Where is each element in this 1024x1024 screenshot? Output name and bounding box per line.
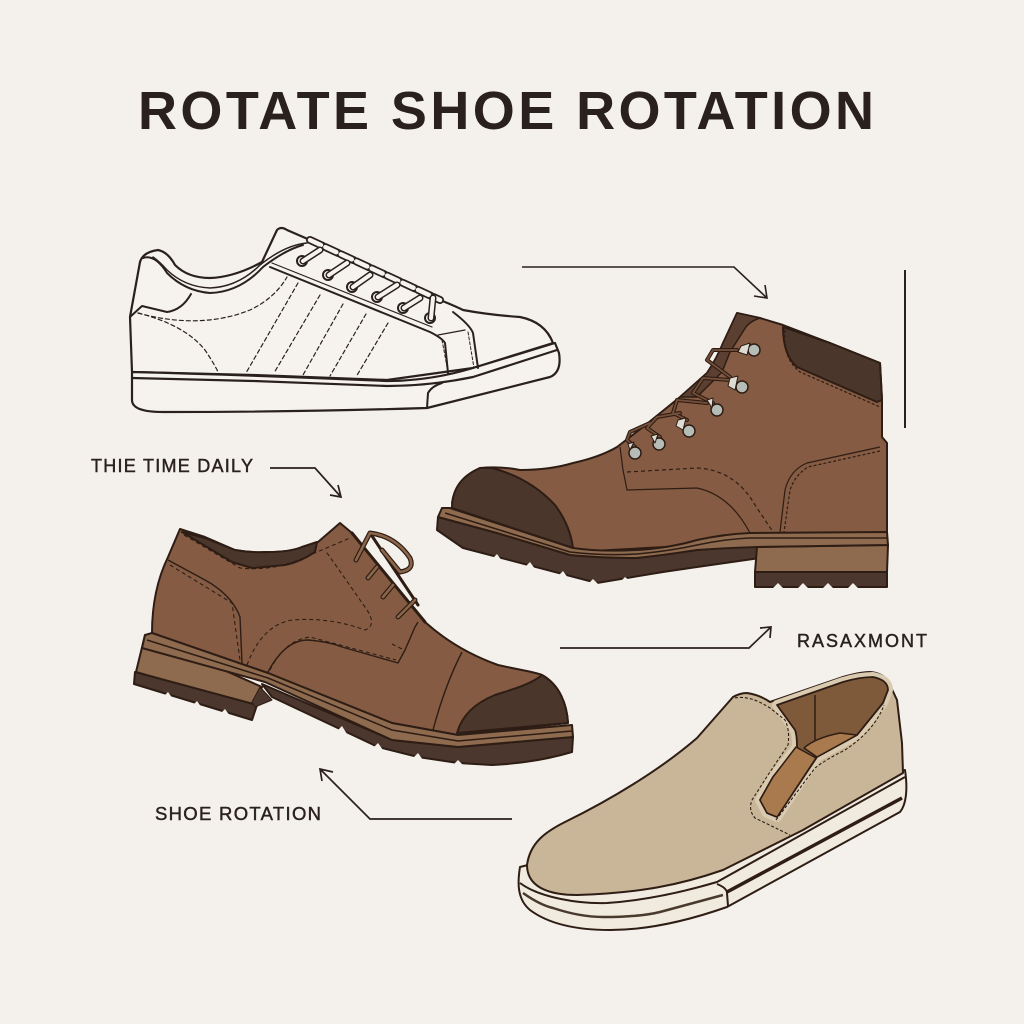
boot upper xyxy=(452,313,887,552)
arrow: bottom left xyxy=(320,769,512,819)
boot welt xyxy=(438,508,888,558)
oxford welt xyxy=(142,633,573,747)
arrow: right middle xyxy=(560,627,771,648)
slip-on foxing lines xyxy=(520,777,905,917)
slip-on sole xyxy=(519,770,906,930)
icon: beige slip-on xyxy=(519,672,906,930)
icon: brown boot xyxy=(437,313,888,588)
slip-on stitching xyxy=(735,697,884,835)
boot sole notches xyxy=(492,554,858,588)
slip-on inner front xyxy=(760,747,816,817)
oxford upper xyxy=(152,523,568,735)
title: ROTATE SHOE ROTATION xyxy=(138,81,874,141)
oxford laces xyxy=(352,533,425,622)
boot tongue xyxy=(680,313,760,397)
oxford sole notches xyxy=(163,692,463,765)
boot laces xyxy=(627,350,737,447)
oxford lining xyxy=(182,532,317,568)
oxford stitching xyxy=(168,560,462,730)
sneaker lace ridge xyxy=(310,240,440,300)
slip-on opening back xyxy=(760,677,888,817)
boot stitching xyxy=(620,330,880,533)
sneaker sole xyxy=(132,343,560,412)
sneaker upper xyxy=(130,228,553,380)
boot outsole xyxy=(437,517,760,583)
icon: brown oxford xyxy=(134,523,573,765)
boot heel xyxy=(755,545,888,572)
icon: white sneaker xyxy=(130,228,560,412)
text: daily label: THIE TIME DAILY xyxy=(91,456,253,476)
boot eyelets xyxy=(628,343,760,459)
oxford outsole xyxy=(252,687,272,707)
text: shoe rotation label: SHOE ROTATION xyxy=(155,803,321,824)
oxford toe cap xyxy=(457,675,568,733)
oxford heel xyxy=(136,635,262,707)
arrow: top right xyxy=(522,267,767,298)
boot toe cap xyxy=(452,468,573,548)
eyelets and laces xyxy=(297,250,435,323)
slip-on upper xyxy=(527,672,903,895)
arrow: daily xyxy=(270,468,341,497)
boot back collar xyxy=(783,327,882,402)
divider line xyxy=(904,270,906,428)
text: rasaxmont label: RASAXMONT xyxy=(797,631,927,651)
